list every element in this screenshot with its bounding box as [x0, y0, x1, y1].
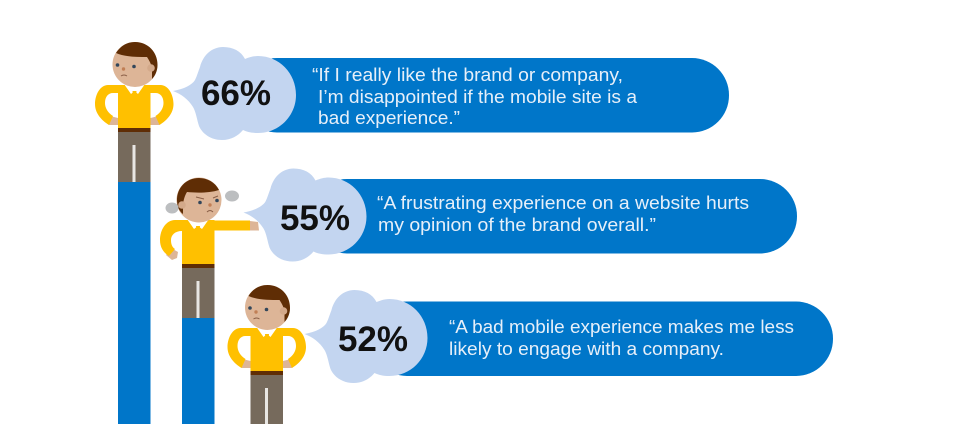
quote — [377, 192, 749, 235]
bar: 55% — [182, 318, 214, 424]
person 2: middle bar, arm extended, fuming — [160, 178, 259, 424]
quote: my opinion of the brand overall.” — [378, 214, 656, 235]
hair — [177, 178, 219, 214]
quote: bad experience.” — [318, 107, 460, 128]
hands — [109, 116, 160, 125]
face — [116, 63, 136, 76]
torso — [182, 220, 214, 264]
percentage: 55% — [280, 199, 350, 238]
torso — [250, 328, 283, 371]
extended hand — [250, 221, 259, 230]
face — [196, 196, 219, 212]
left hand — [166, 248, 178, 260]
ear — [178, 201, 186, 209]
head — [176, 178, 222, 222]
extended arm — [212, 220, 250, 230]
bubble shape — [244, 168, 366, 262]
speech bubble: 52% — [304, 290, 833, 383]
belt — [182, 264, 214, 268]
banner: 66% — [240, 58, 729, 132]
bubble shape — [173, 47, 296, 140]
quote — [312, 64, 638, 128]
banner: 55% — [310, 179, 797, 254]
head — [112, 42, 158, 87]
percentage: 66% — [201, 74, 271, 113]
steam puffs — [166, 190, 239, 214]
bubble shape — [304, 290, 428, 383]
trousers — [182, 268, 214, 318]
trousers — [250, 374, 283, 424]
quote: likely to engage with a company. — [449, 338, 724, 359]
quote: “If I really like the brand or company, — [312, 64, 623, 85]
banner: 52% — [370, 302, 833, 376]
hair — [116, 42, 158, 79]
percentage: 52% — [338, 320, 408, 359]
bar: 66% — [118, 182, 150, 424]
ear — [147, 64, 155, 72]
quote — [449, 316, 794, 359]
belt — [250, 371, 283, 375]
quote: “A frustrating experience on a website hurts — [377, 192, 749, 213]
head — [245, 285, 290, 330]
speech bubble: 55% — [244, 168, 797, 262]
collar — [124, 84, 145, 94]
left arm — [160, 220, 182, 256]
person 1: tallest bar, hands on hips — [95, 42, 174, 424]
hands — [242, 359, 292, 368]
quote: I’m disappointed if the mobile site is a — [318, 86, 638, 107]
torso — [118, 85, 150, 128]
quote: “A bad mobile experience makes me less — [449, 316, 794, 337]
arms — [95, 85, 174, 125]
trousers — [118, 131, 150, 182]
face — [248, 306, 268, 319]
collar — [256, 327, 278, 337]
ear — [280, 307, 287, 315]
hair — [248, 285, 290, 322]
speech bubble: 66% — [173, 47, 729, 140]
arms — [228, 328, 306, 368]
collar — [187, 219, 209, 229]
person 3: shortest, hands on hips — [228, 285, 306, 424]
belt — [118, 128, 150, 132]
